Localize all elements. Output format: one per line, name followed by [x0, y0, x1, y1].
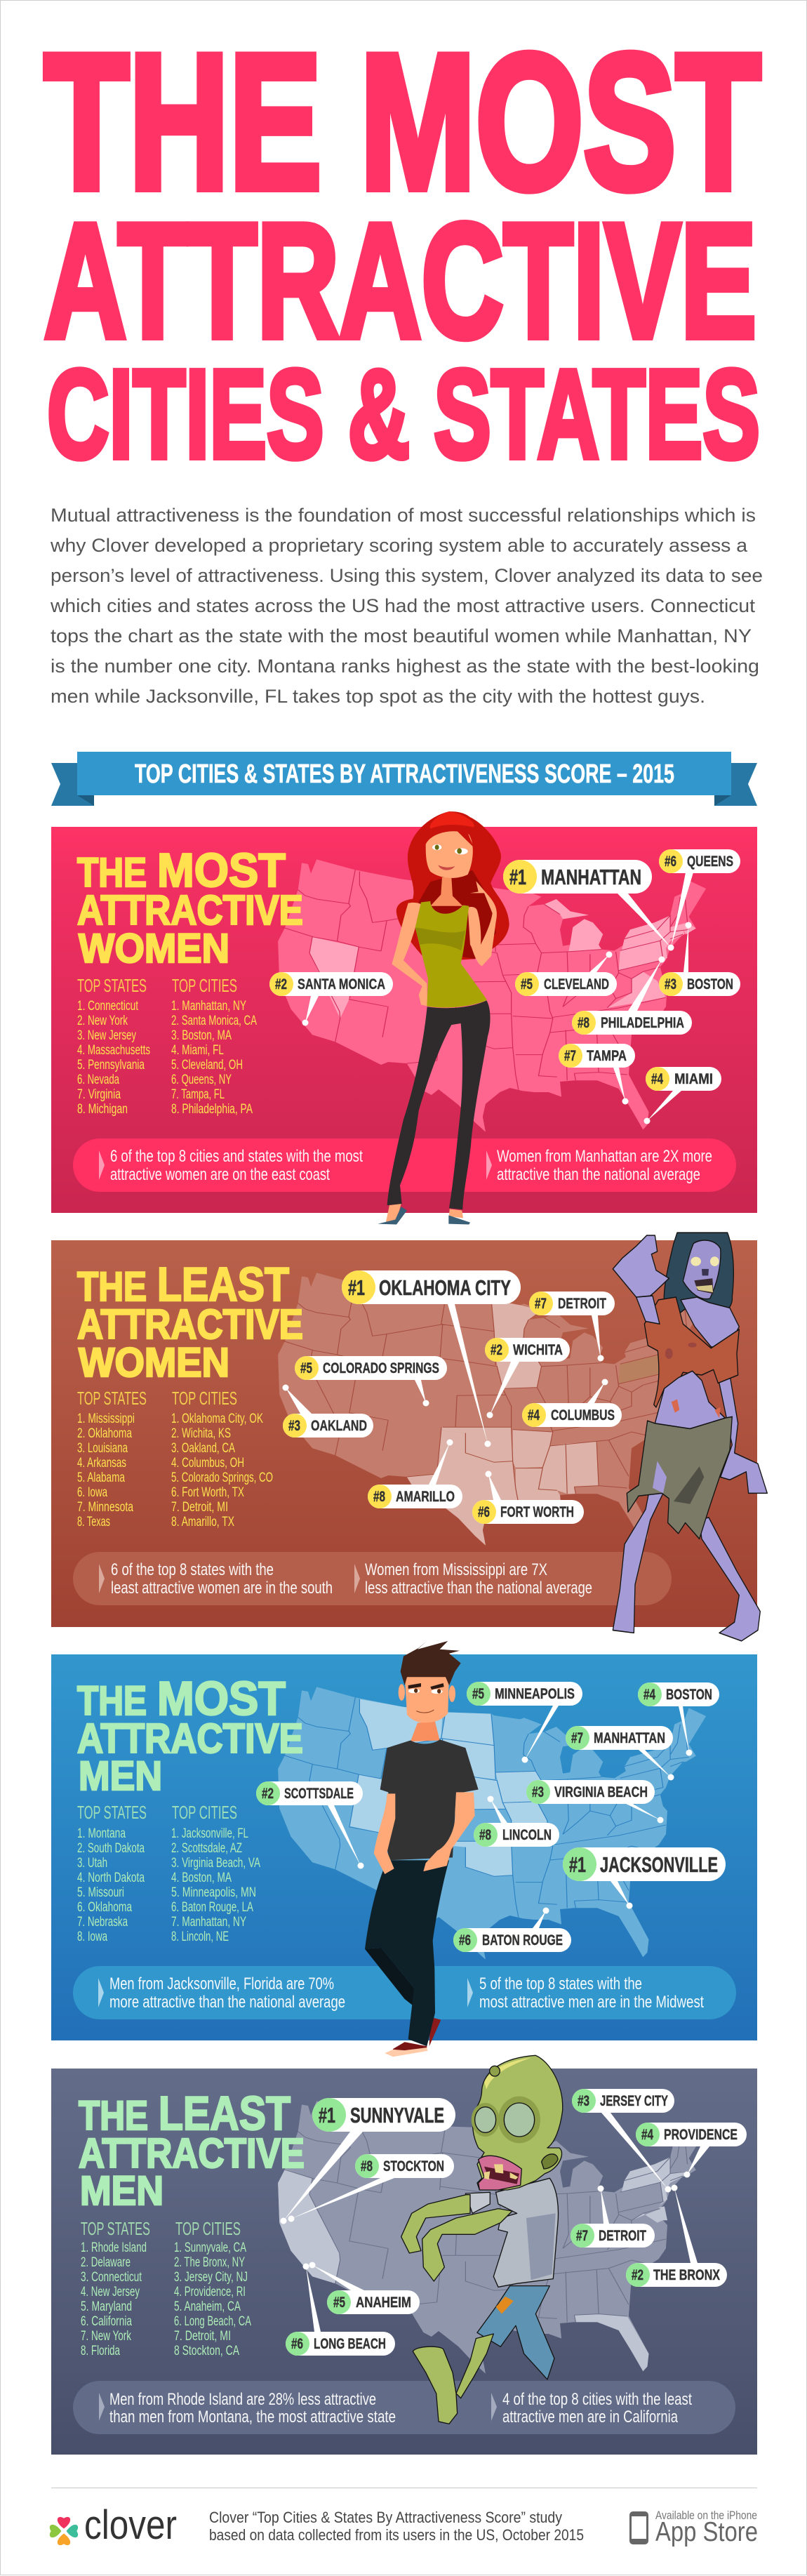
map: women most — [278, 859, 706, 1132]
list: top states — [77, 1388, 147, 1529]
list: top states: 6. California — [81, 2314, 132, 2329]
callout: Anaheim — [309, 2262, 420, 2314]
list: top states: 2. Oklahoma — [77, 1426, 132, 1441]
callout bar: less attractive than the national average — [365, 1579, 592, 1598]
list: top cities: 8. Philadelphia, PA — [171, 1102, 253, 1117]
list: top states: 6. Nevada — [77, 1073, 119, 1087]
heading: the least attractive women: WOMEN — [79, 1340, 229, 1386]
callout bar: most attractive men are in the Midwest — [479, 1993, 704, 2012]
list: top states: TOP STATES — [77, 1802, 147, 1823]
callout: Sunnyvale: #1 — [319, 2103, 335, 2127]
list: top cities: 5. Minneapolis, MN — [171, 1885, 256, 1900]
callout: Stockton: STOCKTON — [383, 2158, 444, 2175]
callout: Jacksonville — [563, 1847, 726, 1909]
list: top cities: 2. Wichita, KS — [171, 1426, 231, 1441]
list: top states: 7. Nebraska — [77, 1915, 128, 1930]
heading: the least attractive women — [77, 1258, 303, 1386]
panel: most attractive men — [51, 1641, 757, 2057]
list: top states: 5. Pennsylvania — [77, 1058, 145, 1073]
callout bar — [73, 2381, 735, 2434]
list: top cities: 2. Scottsdale, AZ — [171, 1841, 242, 1856]
list: top cities — [171, 1388, 273, 1529]
footer: source note: Clover “Top Cities & States By Attractiveness Score” study — [209, 2509, 562, 2526]
callout bar: more attractive than the national average — [109, 1993, 345, 2012]
panel: least attractive men — [51, 2055, 757, 2455]
list: top cities: 1. Sunnyvale, CA — [174, 2240, 246, 2255]
callout: Anaheim: ANAHEIM — [356, 2295, 411, 2311]
callout: Virginia Beach: VIRGINIA BEACH — [554, 1784, 648, 1800]
intro paragraph: which cities and states across the US had the most attractive users. Connecticut — [50, 595, 756, 616]
callout bar: Men from Rhode Island are 28% less attractive — [109, 2390, 376, 2409]
footer: source note — [209, 2509, 584, 2544]
list: top states: 2. Delaware — [81, 2255, 131, 2270]
callout: Providence — [636, 2123, 747, 2177]
footer: app store badge — [629, 2509, 758, 2547]
intro paragraph: men while Jacksonville, FL takes top spot as the city with the hottest guys. — [51, 686, 705, 707]
callout: Philadelphia: #8 — [578, 1015, 589, 1031]
list: top cities: 3. Boston, MA — [171, 1028, 232, 1043]
callout bar: than men from Montana, the most attractive state — [109, 2408, 396, 2426]
callout: Oakland: #3 — [288, 1418, 300, 1434]
callout: Detroit — [529, 1292, 615, 1362]
callout: Santa Monica: #2 — [275, 976, 287, 992]
callout: Tampa: #7 — [564, 1048, 576, 1064]
callout: Detroit: #7 — [535, 1296, 547, 1312]
intro paragraph: Mutual attractiveness is the foundation of most successful relationships which is — [51, 505, 756, 526]
list: top states: 7. Virginia — [77, 1087, 121, 1102]
callout: Sunnyvale: SUNNYVALE — [350, 2103, 444, 2127]
footer: app store badge: App Store — [655, 2517, 758, 2547]
callout: Minneapolis: #5 — [472, 1686, 484, 1702]
list: top cities: 5. Anaheim, CA — [174, 2299, 241, 2314]
callout: Oakland: OAKLAND — [311, 1418, 367, 1434]
heading: the least attractive men: ATTRACTIVE — [79, 2130, 305, 2177]
icon: clover hearts — [50, 2517, 78, 2545]
callout: Manhattan: #7 — [571, 1730, 583, 1746]
callout: Amarillo: AMARILLO — [396, 1489, 455, 1505]
list: top states: TOP STATES — [77, 975, 147, 996]
list: top states: 2. New York — [77, 1014, 128, 1028]
callout: Cleveland — [515, 952, 617, 996]
callout: Jacksonville: JACKSONVILLE — [600, 1852, 718, 1877]
list: top states: 8. Iowa — [77, 1930, 107, 1944]
list: top cities: 6. Long Beach, CA — [174, 2314, 251, 2329]
heading: the most attractive women: ATTRACTIVE — [77, 887, 303, 934]
heading: the least attractive men: LEAST — [159, 2087, 291, 2140]
callout: Manhattan: MANHATTAN — [594, 1730, 665, 1746]
list: top cities — [171, 1802, 260, 1944]
callout: Wichita: #2 — [491, 1342, 502, 1358]
callout: Jacksonville: #1 — [569, 1852, 586, 1877]
map: men least — [278, 2101, 706, 2374]
callout bar: attractive than the national average — [497, 1165, 700, 1184]
callout: Jersey City: #3 — [578, 2093, 589, 2109]
callout: Miami: #4 — [651, 1071, 663, 1087]
callout: Oakland — [282, 1384, 373, 1438]
list: top states: TOP STATES — [81, 2218, 150, 2239]
callout: Detroit — [571, 2186, 655, 2248]
list: top states: 5. Alabama — [77, 1470, 125, 1485]
heading: the least attractive men — [79, 2087, 305, 2214]
callout: Minneapolis: MINNEAPOLIS — [495, 1686, 575, 1702]
list: top cities: 7. Detroit, MI — [174, 2329, 231, 2344]
figure: attractive man — [365, 1641, 479, 2057]
callout: Detroit: DETROIT — [599, 2228, 646, 2244]
figure: zombie man — [401, 2055, 563, 2424]
heading: the most attractive men: MEN — [79, 1753, 162, 1799]
callout: Colorado Springs — [295, 1356, 447, 1407]
callout: Columbus: COLUMBUS — [551, 1407, 615, 1423]
list: top cities: 7. Detroit, MI — [171, 1500, 228, 1515]
list: top cities: 7. Tampa, FL — [171, 1087, 225, 1102]
callout: Virginia Beach: #3 — [532, 1784, 544, 1800]
list: top states — [81, 2218, 150, 2358]
callout: Miami — [644, 1067, 721, 1124]
callout: Boston: BOSTON — [687, 976, 733, 992]
heading: the most attractive men: THE — [77, 1678, 147, 1724]
list: top cities: 6. Queens, NY — [171, 1073, 232, 1087]
callout: Fort Worth — [472, 1471, 584, 1524]
callout: Wichita: WICHITA — [513, 1342, 563, 1358]
list: top states — [77, 975, 150, 1117]
callout: Minneapolis — [467, 1682, 582, 1763]
list: top cities — [174, 2218, 251, 2358]
callout: Columbus: #4 — [528, 1407, 540, 1423]
heading: the most attractive men: MOST — [157, 1672, 286, 1725]
list: top cities: 4. Boston, MA — [171, 1871, 232, 1885]
heading: the least attractive women: ATTRACTIVE — [77, 1301, 303, 1348]
list: top states: 4. Massachusetts — [77, 1043, 150, 1058]
intro paragraph — [50, 505, 763, 707]
heading: the least attractive men: MEN — [80, 2168, 164, 2214]
callout: Tampa: TAMPA — [587, 1048, 627, 1064]
list: top states: 3. Louisiana — [77, 1441, 128, 1456]
footer: clover logo — [50, 2502, 177, 2548]
callout: Tampa — [559, 1044, 635, 1105]
callout: Stockton: #8 — [361, 2158, 373, 2175]
list: top cities: 8. Lincoln, NE — [171, 1930, 229, 1944]
list: top cities: 6. Fort Worth, TX — [171, 1485, 244, 1500]
callout: The Bronx: #2 — [632, 2267, 643, 2283]
list: top states: 2. South Dakota — [77, 1841, 145, 1856]
ribbon banner — [51, 752, 757, 806]
list: top states: 4. Arkansas — [77, 1456, 126, 1470]
figure: attractive woman — [378, 811, 509, 1224]
list: top cities: 3. Jersey City, NJ — [174, 2270, 248, 2285]
callout: Amarillo: #8 — [373, 1489, 385, 1505]
intro paragraph: is the number one city. Montana ranks highest as the state with the best-looking — [51, 656, 759, 677]
callout: Boston — [638, 1682, 719, 1756]
callout: Miami: MIAMI — [674, 1071, 713, 1087]
list: top cities: 5. Cleveland, OH — [171, 1058, 243, 1073]
list: top states: 6. Oklahoma — [77, 1900, 132, 1915]
panel: most attractive women — [51, 811, 757, 1224]
list: top cities: 6. Baton Rouge, LA — [171, 1900, 253, 1915]
list: top cities: 2. The Bronx, NY — [174, 2255, 245, 2270]
list: top cities: 8. Amarillo, TX — [171, 1515, 234, 1529]
list: top states: 3. Connecticut — [81, 2270, 142, 2285]
callout: Manhattan — [503, 860, 674, 950]
list: top states: 1. Montana — [77, 1826, 126, 1841]
callout: Scottsdale: SCOTTSDALE — [284, 1786, 354, 1802]
callout: Jersey City: JERSEY CITY — [600, 2093, 668, 2109]
callout: Long Beach — [286, 2263, 395, 2356]
list: top states: 1. Mississippi — [77, 1412, 135, 1426]
footer: app store badge: Available on the iPhone — [655, 2509, 757, 2522]
callout: Santa Monica — [269, 972, 393, 1026]
list: top cities — [171, 975, 257, 1117]
callout: Long Beach: #6 — [291, 2336, 303, 2352]
callout: Wichita — [485, 1338, 570, 1418]
list: top states: 7. Minnesota — [77, 1500, 133, 1515]
heading: the most attractive women: MOST — [157, 844, 286, 897]
list: top states: 3. New Jersey — [77, 1028, 136, 1043]
list: top states — [77, 1802, 147, 1944]
callout: Lincoln: #8 — [479, 1827, 491, 1843]
callout: Boston: #3 — [665, 976, 676, 992]
list: top cities: 3. Oakland, CA — [171, 1441, 235, 1456]
callout: Manhattan — [566, 1726, 674, 1780]
heading: the least attractive women: LEAST — [157, 1258, 289, 1311]
callout bar: Men from Jacksonville, Florida are 70% — [109, 1974, 334, 1993]
map: men most — [278, 1687, 706, 1960]
callout: Boston: BOSTON — [666, 1687, 712, 1703]
callout bar: 5 of the top 8 states with the — [479, 1974, 642, 1993]
callout: Oklahoma City — [342, 1270, 521, 1447]
callout: Anaheim: #5 — [333, 2295, 345, 2311]
list: top cities: 4. Providence, RI — [174, 2285, 246, 2299]
callout: Scottsdale: #2 — [262, 1786, 274, 1802]
callout bar: 6 of the top 8 cities and states with the most — [110, 1147, 363, 1166]
callout: Amarillo — [368, 1439, 462, 1508]
intro paragraph: person’s level of attractiveness. Using this system, Clover analyzed its data to see — [51, 565, 763, 586]
list: top states: 8. Texas — [77, 1515, 110, 1529]
list: top cities: TOP CITIES — [175, 2218, 241, 2239]
list: top cities: 8 Stockton, CA — [174, 2344, 239, 2358]
callout: Scottsdale — [256, 1781, 364, 1868]
list: top states: 4. North Dakota — [77, 1871, 145, 1885]
callout: Detroit: #7 — [576, 2228, 588, 2244]
heading: the most attractive men — [77, 1672, 303, 1799]
callout bar: 4 of the top 8 cities with the least — [502, 2390, 692, 2409]
intro paragraph: tops the chart as the state with the most beautiful women while Manhattan, NY — [51, 625, 752, 646]
callout: Jersey City — [572, 2089, 674, 2193]
callout bar — [73, 1966, 736, 2019]
list: top cities: TOP CITIES — [172, 1388, 237, 1409]
callout: Boston: #4 — [643, 1687, 655, 1703]
callout: Providence: #4 — [641, 2127, 653, 2143]
heading: the most attractive women: WOMEN — [79, 926, 229, 971]
callout: Queens: #6 — [665, 854, 676, 870]
footer: source note: based on data collected from its users in the US, October 2015 — [209, 2526, 584, 2544]
callout bar: 6 of the top 8 states with the — [111, 1560, 274, 1579]
callout: Colorado Springs: #5 — [300, 1360, 312, 1376]
list: top states: 1. Connecticut — [77, 999, 139, 1014]
heading: the most attractive women: THE — [77, 850, 147, 896]
list: top states: 1. Rhode Island — [81, 2240, 147, 2255]
callout: Baton Rouge — [453, 1908, 571, 1952]
callout: The Bronx: THE BRONX — [653, 2267, 720, 2283]
list: top cities: 7. Manhattan, NY — [171, 1915, 246, 1930]
list: top cities: 2. Santa Monica, CA — [171, 1014, 257, 1028]
callout: Colorado Springs: COLORADO SPRINGS — [323, 1360, 439, 1376]
icon: iphone — [629, 2511, 648, 2544]
callout: Lincoln: LINCOLN — [502, 1827, 552, 1843]
heading: the most attractive men: ATTRACTIVE — [77, 1715, 303, 1762]
callout: Long Beach: LONG BEACH — [314, 2336, 386, 2352]
heading: the least attractive men: THE — [79, 2093, 148, 2139]
heading: the least attractive women: THE — [77, 1264, 147, 1310]
list: top states: 6. Iowa — [77, 1485, 107, 1500]
list: top cities: 1. Jacksonville, FL — [171, 1826, 248, 1841]
callout bar: Women from Manhattan are 2X more — [497, 1147, 712, 1166]
list: top cities: 1. Manhattan, NY — [171, 999, 246, 1014]
callout: The Bronx — [626, 2184, 727, 2287]
list: top cities: 1. Oklahoma City, OK — [171, 1412, 263, 1426]
list: top states: 7. New York — [81, 2329, 131, 2344]
callout: Stockton — [288, 2154, 454, 2222]
callout: Manhattan: MANHATTAN — [541, 865, 641, 889]
callout: Fort Worth: #6 — [478, 1504, 490, 1520]
list: top states: 5. Missouri — [77, 1885, 124, 1900]
callout: Santa Monica: SANTA MONICA — [298, 976, 385, 992]
footer: clover logo: clover — [84, 2502, 177, 2548]
panel: least attractive women — [51, 1233, 767, 1641]
callout: Cleveland: CLEVELAND — [544, 976, 609, 992]
callout: Boston — [659, 922, 740, 996]
intro paragraph: why Clover developed a proprietary scoring system able to accurately assess a — [50, 535, 748, 556]
callout: Detroit: DETROIT — [558, 1296, 606, 1312]
list: top states: 5. Maryland — [81, 2299, 132, 2314]
list: top states: 4. New Jersey — [81, 2285, 140, 2299]
callout: Baton Rouge: BATON ROUGE — [482, 1932, 563, 1948]
callout: Queens: QUEENS — [687, 854, 733, 870]
callout bar — [73, 1552, 672, 1605]
callout: Oklahoma City: #1 — [348, 1275, 365, 1300]
list: top states: 8. Michigan — [77, 1102, 128, 1117]
callout: Sunnyvale — [281, 2098, 455, 2224]
heading: the most attractive women — [77, 844, 303, 971]
callout: Virginia Beach — [526, 1780, 664, 1824]
callout: Providence: PROVIDENCE — [664, 2127, 738, 2143]
callout bar: attractive women are on the east coast — [110, 1165, 330, 1184]
list: top cities: 5. Colorado Springs, CO — [171, 1470, 273, 1485]
callout: Philadelphia: PHILADELPHIA — [601, 1015, 684, 1031]
list: top cities: 4. Columbus, OH — [171, 1456, 244, 1470]
callout bar — [73, 1138, 736, 1192]
callout bar: attractive men are in California — [502, 2408, 678, 2426]
list: top states: 3. Utah — [77, 1856, 107, 1871]
callout: Baton Rouge: #6 — [459, 1932, 471, 1948]
callout: Cleveland: #5 — [521, 976, 533, 992]
list: top cities: TOP CITIES — [172, 1802, 237, 1823]
callout: Manhattan: #1 — [509, 865, 526, 889]
list: top states: 8. Florida — [81, 2344, 120, 2358]
figure: zombie woman — [613, 1233, 767, 1641]
callout bar: Women from Mississippi are 7X — [365, 1560, 547, 1579]
callout bar: least attractive women are in the south — [111, 1579, 333, 1598]
list: top cities: 3. Virginia Beach, VA — [171, 1856, 260, 1871]
list: top cities: 4. Miami, FL — [171, 1043, 224, 1058]
title — [44, 15, 761, 485]
callout: Lincoln — [474, 1795, 559, 1847]
callout: Columbus — [522, 1379, 622, 1427]
list: top cities: TOP CITIES — [172, 975, 237, 996]
callout: Queens — [659, 849, 740, 948]
list: top states: TOP STATES — [77, 1388, 147, 1409]
map: women least — [278, 1273, 706, 1546]
callout: Oklahoma City: OKLAHOMA CITY — [379, 1275, 511, 1300]
callout: Fort Worth: FORT WORTH — [500, 1504, 574, 1520]
callout: Philadelphia — [572, 956, 692, 1035]
